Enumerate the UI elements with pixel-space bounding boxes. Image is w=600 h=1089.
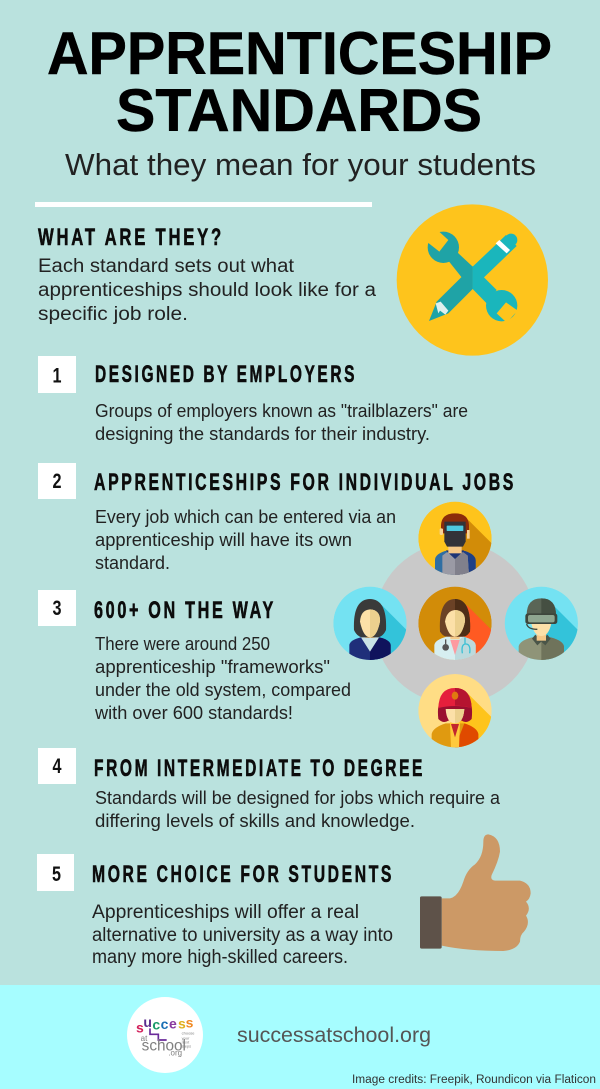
title: STANDARDS xyxy=(116,77,482,144)
website url: successatschool.org xyxy=(237,1024,431,1047)
number box 1: 1 xyxy=(52,364,62,388)
text 5 xyxy=(92,902,393,968)
logo: success at school: steps xyxy=(182,1044,191,1049)
heading 1: DESIGNED BY EMPLOYERS xyxy=(95,361,357,388)
logo: success at school: choose xyxy=(182,1031,195,1036)
text 4 xyxy=(95,788,501,831)
logo: success at school: .org xyxy=(168,1049,182,1058)
step 4 xyxy=(38,748,501,831)
logo: success at school: c xyxy=(161,1016,169,1032)
text 3: apprenticeship "frameworks" xyxy=(95,657,330,677)
logo: success at school xyxy=(127,997,203,1073)
logo: success at school: at xyxy=(141,1034,148,1043)
logo: success at school: your xyxy=(182,1035,190,1040)
step 3 xyxy=(38,590,351,723)
step 5 xyxy=(37,854,394,968)
logo: success at school: next xyxy=(182,1039,190,1044)
avatar: business woman xyxy=(334,586,406,660)
text 2: apprenticeship will have its own xyxy=(95,530,352,550)
avatar: doctor xyxy=(418,586,492,660)
text 1: Groups of employers known as "trailblazers" are xyxy=(95,401,468,421)
avatar: soldier xyxy=(504,586,578,660)
text: definition: specific job role. xyxy=(38,304,188,325)
image credits: Image credits: Freepik, Roundicon via Flaticon xyxy=(352,1074,596,1086)
text 1 xyxy=(95,401,468,444)
number box 3: 3 xyxy=(52,597,62,620)
text 4: Standards will be designed for jobs which require a xyxy=(95,788,501,808)
heading 5: MORE CHOICE FOR STUDENTS xyxy=(92,861,394,888)
text 5: alternative to university as a way into xyxy=(92,925,393,946)
panel: what are they xyxy=(38,224,376,325)
text 1: designing the standards for their industry. xyxy=(95,424,430,444)
title xyxy=(47,20,552,144)
text 2: Every job which can be entered via an xyxy=(95,507,396,527)
logo: success at school: s xyxy=(136,1019,144,1035)
number box 5 xyxy=(37,854,74,891)
logo: success at school: u xyxy=(143,1014,152,1030)
logo: success at school: school xyxy=(142,1037,186,1054)
logo: success at school: s xyxy=(178,1015,186,1031)
heading: what are they: WHAT ARE THEY? xyxy=(38,224,224,251)
number box 5: 5 xyxy=(52,863,61,886)
text 2: standard. xyxy=(95,553,170,573)
number box 2: 2 xyxy=(52,470,62,493)
number box 1 xyxy=(38,356,76,393)
title: APPRENTICESHIP xyxy=(47,20,552,87)
number box 3 xyxy=(38,590,76,626)
icon: crossed wrench and pencil xyxy=(397,204,548,356)
heading 4: FROM INTERMEDIATE TO DEGREE xyxy=(94,755,425,782)
text 4: differing levels of skills and knowledge. xyxy=(95,811,415,831)
illustration: workers group xyxy=(333,502,585,754)
subtitle: What they mean for your students xyxy=(65,147,536,182)
number box 4 xyxy=(38,748,76,784)
logo: success at school: e xyxy=(169,1015,177,1031)
logo: success at school: c xyxy=(152,1017,160,1033)
icon: thumbs up xyxy=(420,834,531,951)
text 3: There were around 250 xyxy=(95,634,270,654)
avatar: welder xyxy=(418,502,492,575)
heading 3: 600+ ON THE WAY xyxy=(94,597,276,624)
step 1 xyxy=(38,356,468,444)
text: definition: Each standard sets out what xyxy=(38,256,295,277)
number box 4: 4 xyxy=(52,755,62,778)
text: definition xyxy=(38,256,376,325)
text 5: many more high-skilled careers. xyxy=(92,947,348,968)
text 5: Apprenticeships will offer a real xyxy=(92,902,359,923)
text 3: with over 600 standards! xyxy=(94,703,293,723)
step 2 xyxy=(38,463,516,573)
text 3 xyxy=(94,634,351,723)
logo: success at school: s xyxy=(186,1015,194,1031)
number box 2 xyxy=(38,463,76,499)
footer band xyxy=(0,985,600,1089)
text: definition: apprenticeships should look like for a xyxy=(38,280,376,301)
avatar: firefighter xyxy=(418,674,492,748)
text 3: under the old system, compared xyxy=(95,680,351,700)
text 2 xyxy=(95,507,396,573)
